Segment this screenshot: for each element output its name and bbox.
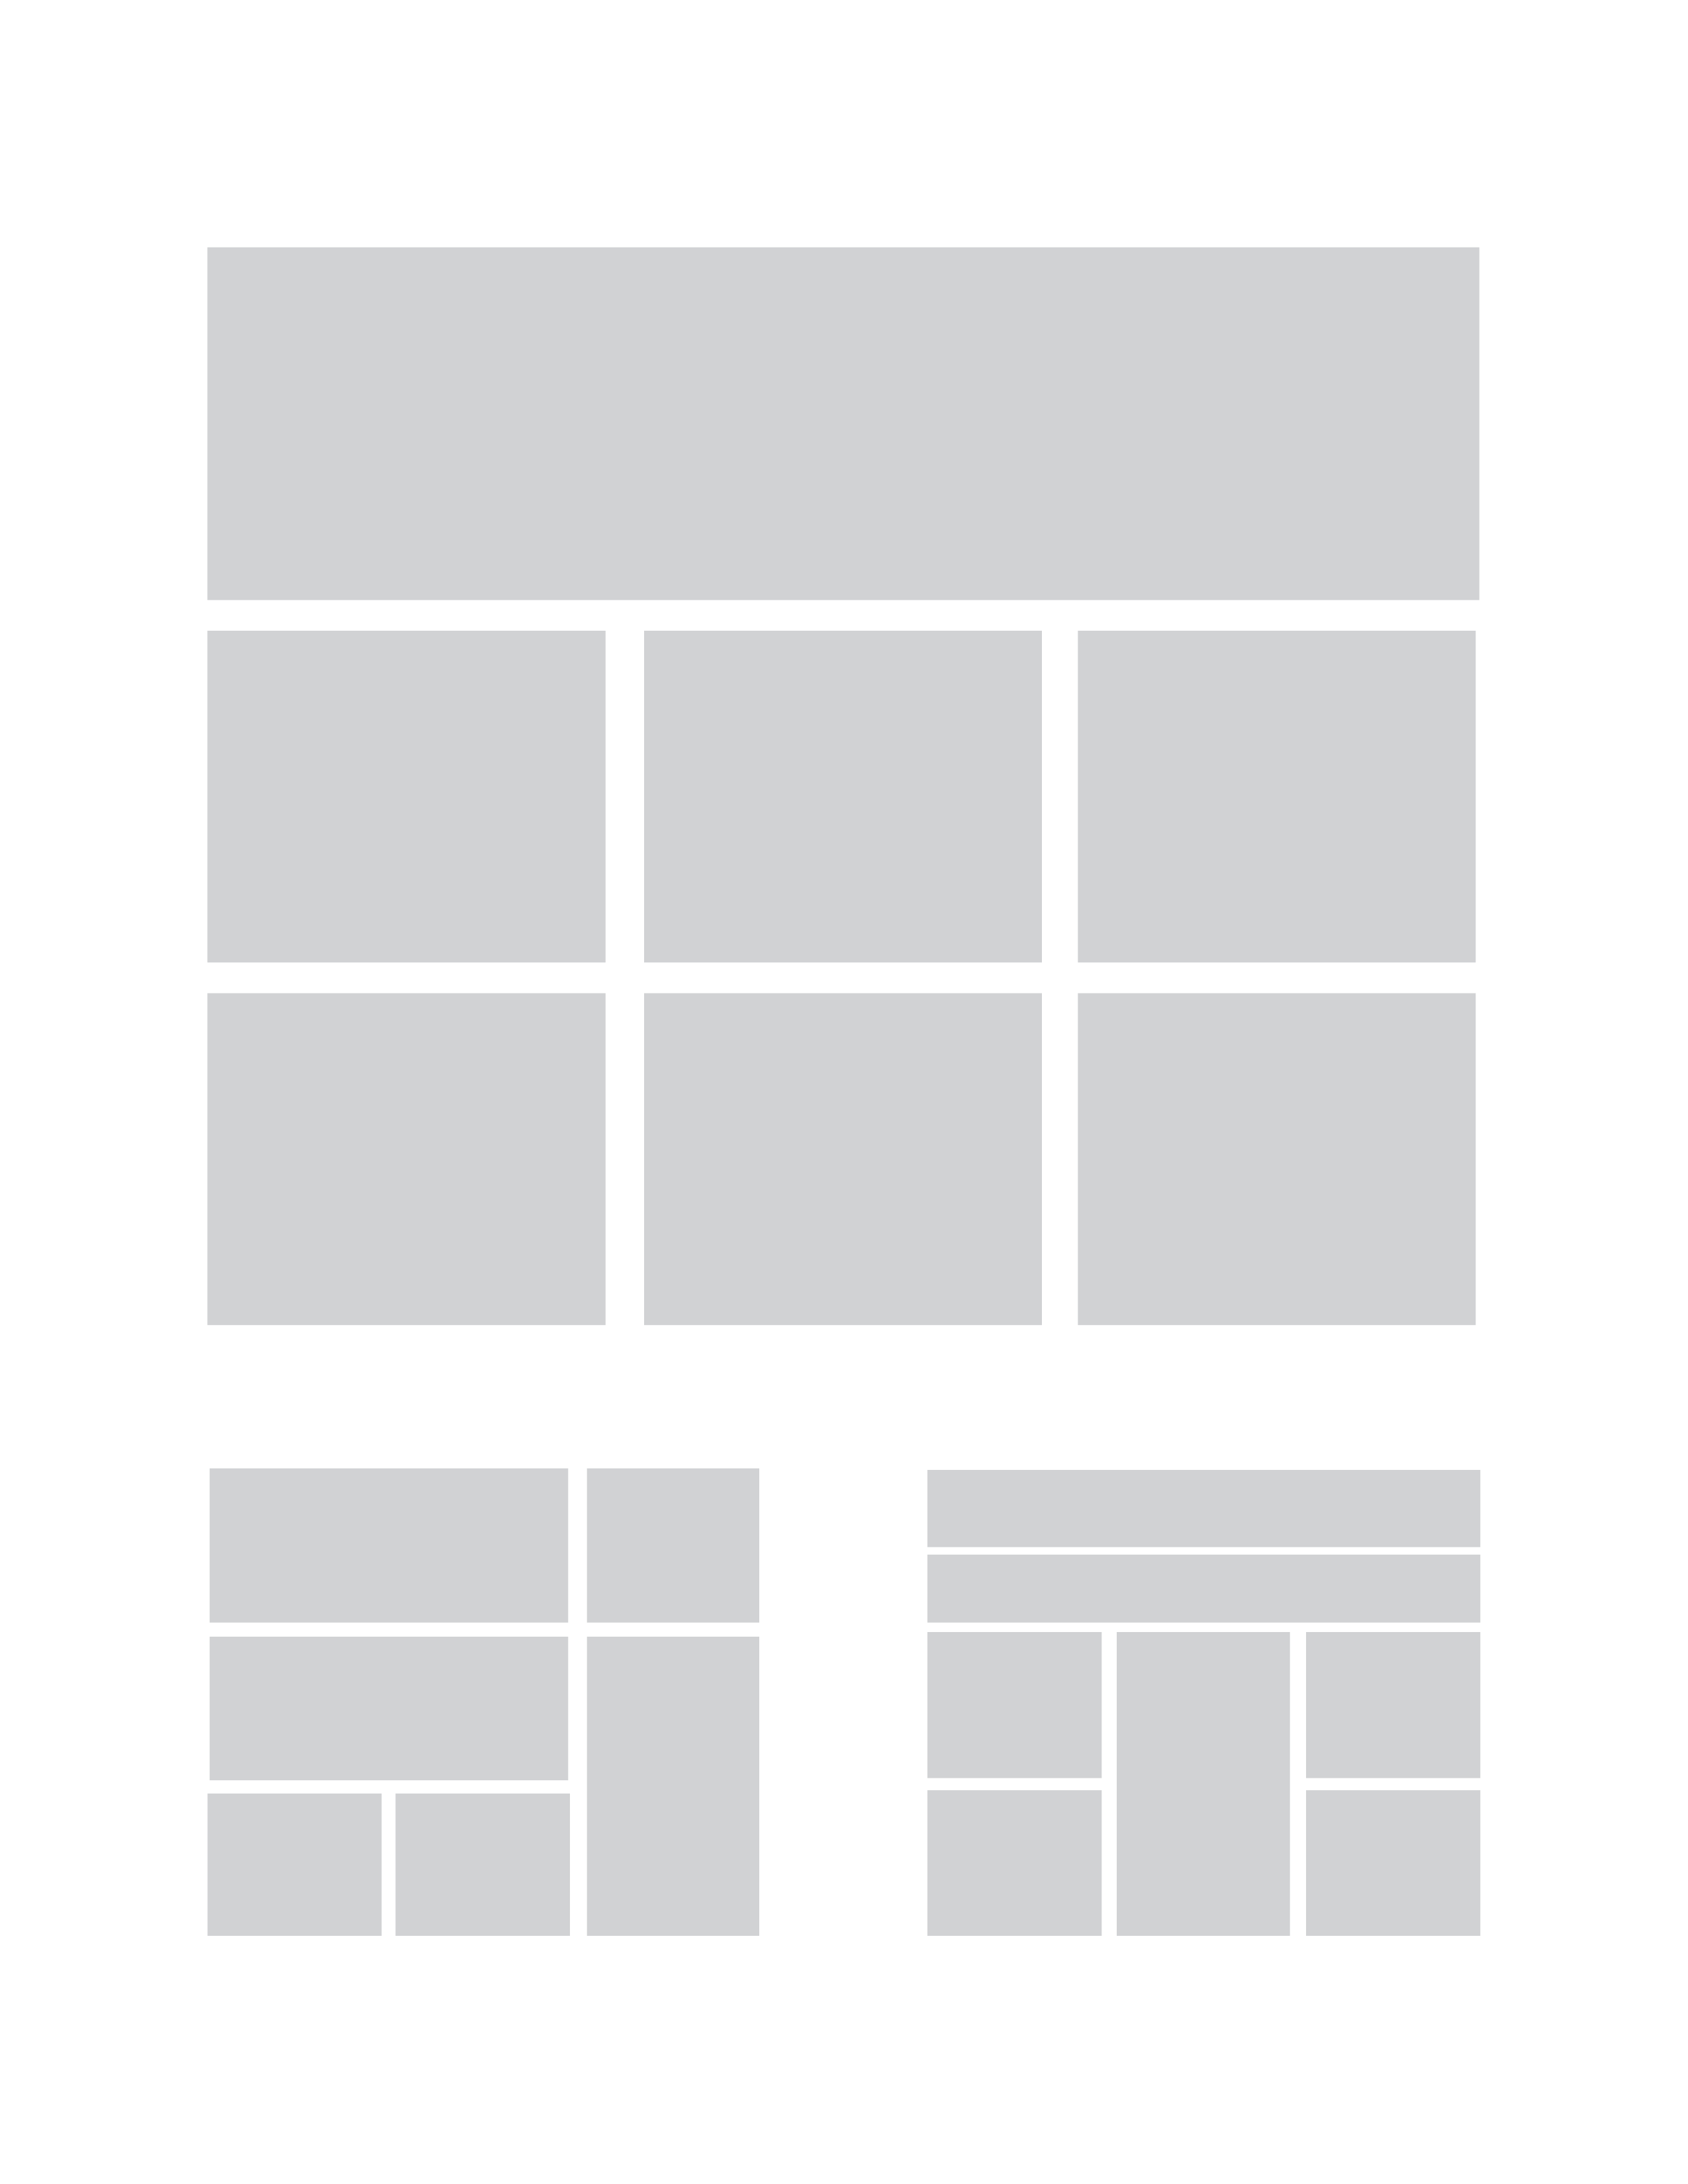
panel: right group strip 2 [927,1555,1480,1623]
panel: left group narrow top [587,1469,759,1623]
panel: right group strip 1 [927,1470,1480,1547]
panel: row 2 column 3 [1078,993,1476,1325]
panel: left group wide middle [210,1637,568,1780]
panel: right group right upper [1306,1632,1480,1778]
panel: left group bottom small 1 [208,1794,381,1936]
panel: row 1 column 2 [644,631,1042,962]
panel: row 1 column 3 [1078,631,1476,962]
panel: left group wide top [210,1469,568,1623]
panel: right group right lower [1306,1790,1480,1936]
panel: row 1 column 1 [207,631,606,962]
panel: right group centre tall [1117,1632,1290,1936]
panel: row 2 column 2 [644,993,1042,1325]
panel: left group bottom small 2 [396,1794,570,1936]
panel: right group left lower [927,1790,1102,1936]
panel: left group tall right [587,1637,759,1936]
panel: top banner [207,248,1479,600]
panel: row 2 column 1 [207,993,606,1325]
panel: right group left upper [927,1632,1102,1778]
